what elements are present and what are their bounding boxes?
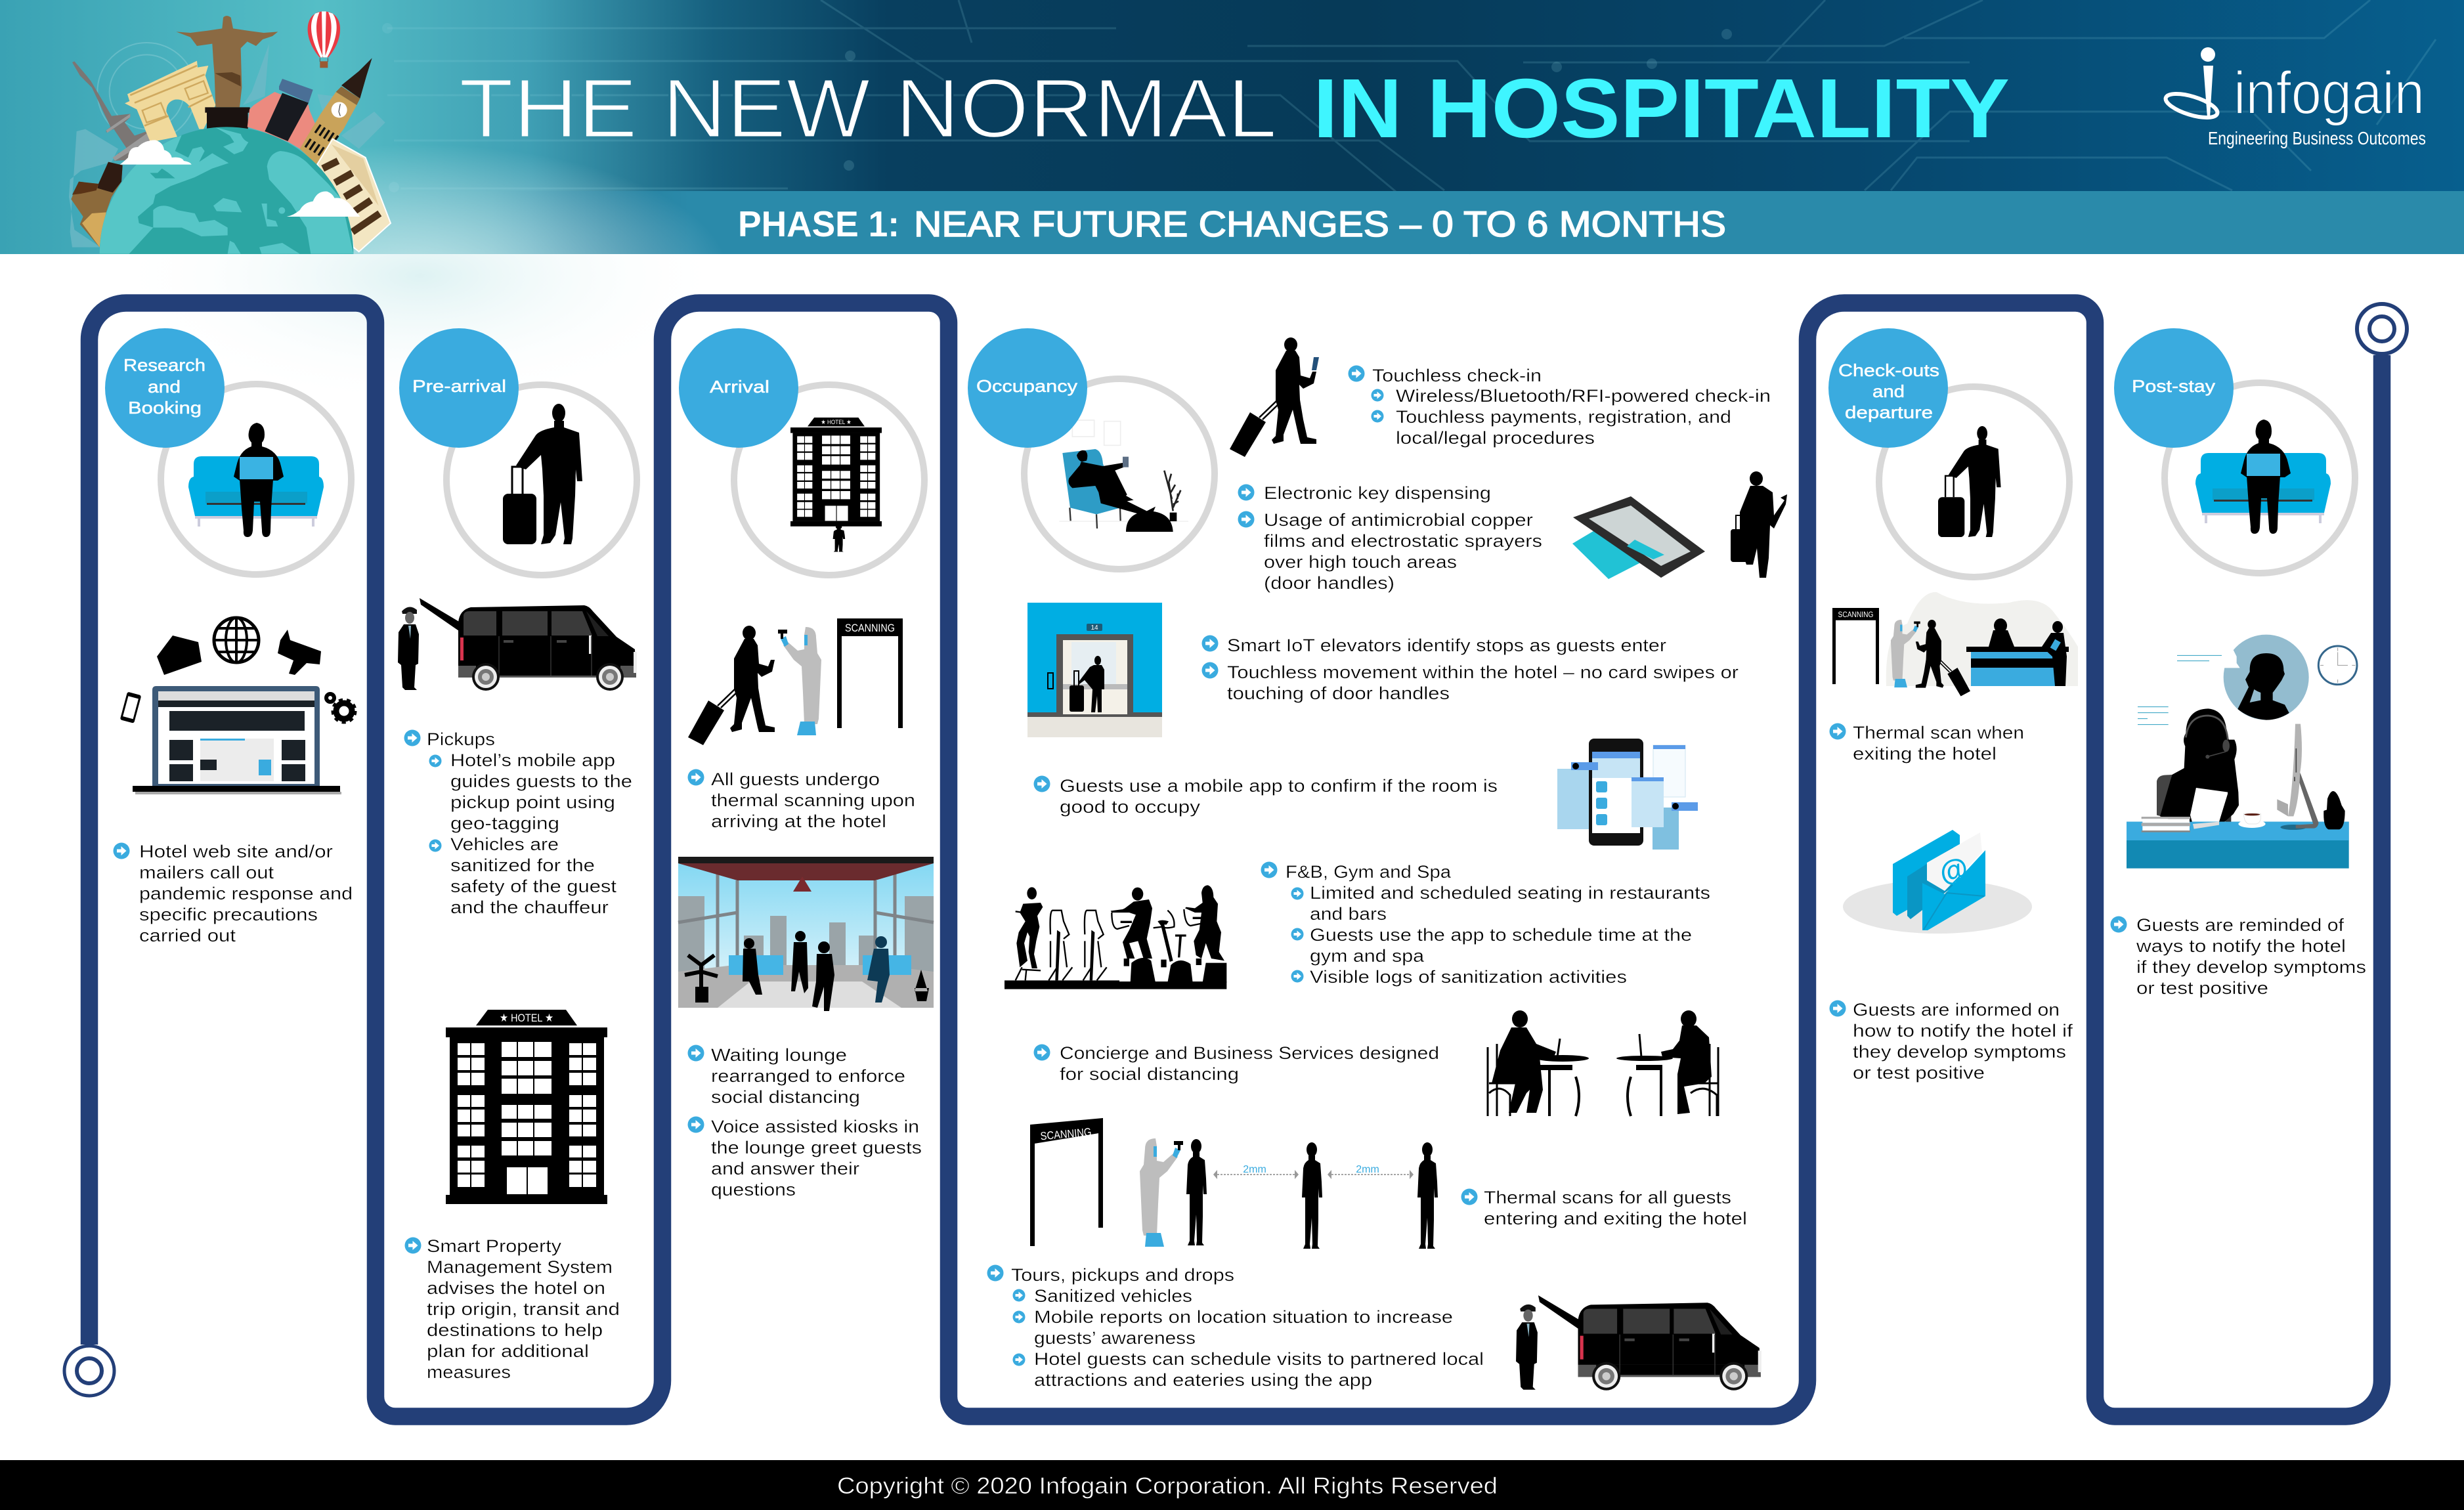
text block: smart property: measures xyxy=(427,1362,511,1382)
icon: megaphone xyxy=(278,630,321,675)
icon: mobile app screens xyxy=(1557,739,1698,850)
stage badge: and xyxy=(1872,381,1905,401)
stage badge: Post-stay xyxy=(2132,376,2215,396)
icon: dark tower xyxy=(265,79,313,141)
text block: thermal scanning xyxy=(688,769,915,831)
stage badge: Check-outs xyxy=(1838,360,1939,380)
icon: pedestal xyxy=(205,107,250,129)
icon: man with suitcase xyxy=(1938,426,2001,537)
text block: smart property: destinations to help xyxy=(427,1320,603,1340)
icon: person on sofa xyxy=(188,423,324,537)
text block: f&b gym spa: and bars xyxy=(1310,904,1387,924)
icon: key card and tablet xyxy=(1572,496,1705,579)
text block: pickups: sanitized for the xyxy=(450,855,595,875)
ring xyxy=(734,385,924,575)
text block: touchless check-in: local/legal procedures xyxy=(1396,428,1595,448)
soft glow under header xyxy=(112,144,729,407)
text block: concierge xyxy=(1033,1043,1439,1084)
title: IN HOSPITALITY xyxy=(1313,62,2010,156)
icon: gears xyxy=(326,694,355,722)
icon: guest with suitcase and hand raised xyxy=(1731,471,1787,578)
icon: small guest xyxy=(833,525,845,551)
text block: touchless check-in: Touchless check-in xyxy=(1372,366,1542,385)
text block: notify hotel: they develop symptoms xyxy=(1853,1042,2066,1062)
icon: laptop with website xyxy=(133,686,341,794)
text block: reminder: Guests are reminded of xyxy=(2136,915,2345,935)
illustration: smart elevator: 14 xyxy=(1091,624,1098,632)
text block: touchless check-in: Wireless/Bluetooth/RFI-powered check-in xyxy=(1396,386,1771,406)
text block: concierge: for social distancing xyxy=(1060,1064,1239,1084)
stage badge xyxy=(968,328,1087,448)
icon: van and chauffeur xyxy=(1516,1295,1762,1391)
illustration: call centre agent xyxy=(2127,635,2357,869)
icon: hazmat scanner xyxy=(778,627,821,735)
text block: iot elevators: Touchless movement within the hotel – no card swipes or xyxy=(1227,662,1739,682)
icon: scanner attendant xyxy=(1140,1138,1183,1247)
ring xyxy=(446,385,637,575)
logo: infogain xyxy=(2163,47,2426,148)
header banner xyxy=(0,0,2464,254)
text block: tours: attractions and eateries using the app xyxy=(1034,1370,1372,1390)
distance marker one: 2mm xyxy=(1243,1164,1266,1175)
text block: tours: guests’ awareness xyxy=(1034,1328,1196,1348)
text block: pickups: pickup point using xyxy=(450,792,615,812)
text block: key and copper films: Usage of antimicrobial copper xyxy=(1264,510,1533,530)
icon: classical building xyxy=(317,139,391,251)
monitor xyxy=(2277,724,2319,830)
books xyxy=(2142,817,2190,832)
text block: notify hotel: or test positive xyxy=(1853,1063,1985,1083)
text block: pickups: Hotel’s mobile app xyxy=(450,750,615,770)
text block: tours: Mobile reports on location situation to increase xyxy=(1034,1307,1453,1327)
icon: van and chauffeur xyxy=(398,598,637,691)
icon: email envelopes xyxy=(1843,830,2032,934)
text block: lounge and kiosks: rearranged to enforce xyxy=(711,1066,905,1086)
icon: globe xyxy=(214,618,259,662)
stage badge xyxy=(399,328,519,448)
text block: tours: Hotel guests can schedule visits to partnered local xyxy=(1034,1349,1484,1369)
title: THE NEW NORMAL xyxy=(459,62,1277,156)
text block: smart property: Management System xyxy=(427,1257,613,1277)
text block: pickups: Vehicles are xyxy=(450,834,559,854)
icon: eiffel tower xyxy=(72,61,151,161)
panel: check-outs and departure xyxy=(1828,328,2078,1083)
icon: two guests at separated tables xyxy=(1488,1010,1718,1116)
text block: f&b gym spa: Guests use the app to schedule time at the xyxy=(1310,925,1692,945)
text block: thermal scanning: All guests undergo xyxy=(711,769,880,789)
icon: angled gate xyxy=(1030,1118,1103,1246)
stage badge xyxy=(2114,328,2234,448)
text block: thermal scan: Thermal scan when xyxy=(1853,723,2024,743)
desk xyxy=(2127,822,2349,869)
text block: touchless check-in: Touchless payments, registration, and xyxy=(1396,407,1731,427)
stage badge xyxy=(679,328,798,448)
panel: pre-arrival xyxy=(398,328,637,1382)
stage badge: Research xyxy=(123,355,205,375)
stage badge xyxy=(1828,328,1948,448)
text block: concierge: Concierge and Business Services designed xyxy=(1060,1043,1439,1063)
icon: angled gate: SCANNING xyxy=(1040,1126,1092,1142)
illustration: gym silhouettes xyxy=(1005,885,1226,989)
text block: smart property: Smart Property xyxy=(427,1236,562,1256)
distance marker two xyxy=(1328,1164,1414,1179)
icon: end target xyxy=(2357,304,2407,354)
text block: room app: Guests use a mobile app to confirm if the room is xyxy=(1060,776,1498,796)
stage badge: Occupancy xyxy=(976,376,1077,396)
title xyxy=(459,62,2010,156)
illustration: smart elevator xyxy=(1027,603,1162,737)
subtitle: PHASE 1: xyxy=(738,204,899,244)
text block: notify hotel xyxy=(1829,1000,2073,1083)
text block: pickups: and the chauffeur xyxy=(450,897,609,917)
illustration: exit scan at reception xyxy=(1832,592,2078,696)
text block: lounge and kiosks: Waiting lounge xyxy=(711,1045,847,1065)
ring xyxy=(1024,379,1215,569)
text block: lounge and kiosks: the lounge greet guests xyxy=(711,1138,922,1157)
icon: phone xyxy=(120,692,141,723)
text block: pickups: safety of the guest xyxy=(450,876,617,896)
icon: walking guest xyxy=(688,626,775,745)
stage badge: Pre-arrival xyxy=(412,376,506,396)
paper xyxy=(2193,822,2219,829)
footer xyxy=(0,1460,2464,1510)
icon: person on sofa xyxy=(2195,420,2331,534)
text block: touchless check-in xyxy=(1349,365,1771,448)
panel: post-stay xyxy=(2110,328,2366,998)
text block: smart property: advises the hotel on xyxy=(427,1278,605,1298)
ring xyxy=(161,384,351,574)
panel: occupancy xyxy=(968,328,1787,1391)
stage badge xyxy=(105,328,225,448)
ring xyxy=(1879,387,2069,577)
icon: brochure xyxy=(157,636,202,675)
icon: hotel building xyxy=(446,1010,607,1204)
text block: room app xyxy=(1033,776,1498,817)
landmarks and globe illustration xyxy=(69,11,391,254)
text block: pickups: guides guests to the xyxy=(450,771,632,791)
text block: reminder: if they develop symptoms xyxy=(2136,957,2366,977)
stage badge: Arrival xyxy=(710,377,769,397)
text block: lounge and kiosks: Voice assisted kiosks in xyxy=(711,1117,919,1136)
text block: thermal scans: Thermal scans for all guests xyxy=(1484,1188,1731,1207)
icon: cactus xyxy=(2324,791,2345,829)
text block: f&b gym spa: Limited and scheduled seating in restaurants xyxy=(1310,883,1710,903)
text block: lounge and kiosks: questions xyxy=(711,1180,796,1199)
icon: start target xyxy=(64,1346,114,1396)
stage badge: and xyxy=(148,377,181,397)
icon: guest walking with phone xyxy=(1230,337,1319,457)
stage badge: departure xyxy=(1845,402,1933,422)
text block: lounge and kiosks xyxy=(688,1045,922,1199)
text block: thermal scan: exiting the hotel xyxy=(1853,744,1997,764)
text block: pickups: Pickups xyxy=(427,729,495,749)
text block: smart property: trip origin, transit and xyxy=(427,1299,620,1319)
globe land masses xyxy=(100,127,353,254)
text block: tours: Tours, pickups and drops xyxy=(1011,1265,1234,1285)
illustration: waiting lounge xyxy=(678,857,934,1011)
text block: pickups: geo-tagging xyxy=(450,813,559,833)
icon: hot air balloon xyxy=(308,11,340,68)
text block: smart property xyxy=(404,1236,620,1382)
cup xyxy=(2238,813,2266,828)
icon: scanning gate xyxy=(837,618,903,728)
text block: f&b gym spa xyxy=(1261,861,1710,987)
journey path xyxy=(64,303,2407,1416)
icon: arc de triomphe xyxy=(125,61,215,141)
text block: key and copper films: (door handles) xyxy=(1264,573,1394,593)
icon: guest two xyxy=(1302,1142,1322,1249)
text block: f&b gym spa: gym and spa xyxy=(1310,946,1424,966)
footer: Copyright © 2020 Infogain Corporation. All Rights Reserved xyxy=(837,1473,1498,1499)
text block: notify hotel: how to notify the hotel if xyxy=(1853,1021,2073,1041)
illustration: distanced queue at scanner xyxy=(1030,1118,1438,1249)
text block: carried out xyxy=(139,926,236,945)
icon: clock xyxy=(2318,646,2357,685)
text block: reminder xyxy=(2110,915,2366,998)
text block: f&b gym spa: F&B, Gym and Spa xyxy=(1286,862,1451,882)
text block: specific precautions xyxy=(139,905,318,924)
text block: thermal scans xyxy=(1461,1188,1747,1228)
text block: notify hotel: Guests are informed on xyxy=(1853,1000,2060,1020)
icon: guest three xyxy=(1417,1142,1438,1249)
text block: thermal scanning: arriving at the hotel xyxy=(711,811,886,831)
icon: brown building xyxy=(71,162,123,248)
text block: key and copper films: Electronic key dispensing xyxy=(1264,483,1491,503)
text block: room app: good to occupy xyxy=(1060,797,1201,817)
text block: mailers call out xyxy=(139,863,274,882)
icon: clouds xyxy=(120,140,360,217)
text block: lounge and kiosks: and answer their xyxy=(711,1159,859,1178)
text block: iot elevators: Smart IoT elevators identify stops as guests enter xyxy=(1227,636,1666,655)
text block: pandemic response and xyxy=(139,884,353,903)
text block: key and copper films xyxy=(1238,483,1542,593)
text block: tours: Sanitized vehicles xyxy=(1034,1286,1192,1306)
text block: thermal scanning: thermal scanning upon xyxy=(711,790,915,810)
call bubble with guest xyxy=(2177,635,2309,720)
icon: email envelopes: @ xyxy=(1936,851,1972,890)
stage badge: Booking xyxy=(128,398,202,418)
distance marker one xyxy=(1213,1164,1299,1179)
text block: smart property: plan for additional xyxy=(427,1341,589,1361)
icon: small hotel xyxy=(790,418,882,527)
text block: iot elevators xyxy=(1201,636,1739,703)
icon: big ben xyxy=(300,58,372,164)
icon: christ statue xyxy=(176,16,278,107)
text block: reminder: or test positive xyxy=(2136,978,2268,998)
text block: f&b gym spa: Visible logs of sanitization activities xyxy=(1310,967,1627,987)
text block: key and copper films: films and electrostatic sprayers xyxy=(1264,531,1542,551)
ring xyxy=(2165,383,2355,573)
text block: thermal scan xyxy=(1829,723,2024,764)
text block: tours xyxy=(987,1264,1484,1390)
distance marker two: 2mm xyxy=(1356,1164,1379,1175)
panel: research and booking xyxy=(105,328,355,945)
text block xyxy=(113,842,353,945)
text block: lounge and kiosks: social distancing xyxy=(711,1087,860,1107)
text block: pickups xyxy=(404,729,632,917)
icon: guest one xyxy=(1186,1139,1207,1245)
icon: pyramid xyxy=(248,92,315,149)
icon: man with suitcase xyxy=(503,404,582,544)
text block: Hotel web site and/or xyxy=(139,842,333,861)
panel: arrival xyxy=(678,328,934,1199)
subtitle: NEAR FUTURE CHANGES – 0 TO 6 MONTHS xyxy=(914,204,1726,244)
text block: key and copper films: over high touch areas xyxy=(1264,552,1457,572)
icon: guest relaxing in chair xyxy=(1059,420,1188,532)
text block: reminder: ways to notify the hotel xyxy=(2136,936,2346,956)
globe xyxy=(100,127,353,254)
text block: iot elevators: touching of door handles xyxy=(1227,683,1450,703)
text block: thermal scans: entering and exiting the hotel xyxy=(1484,1209,1747,1228)
logo: infogain: infogain xyxy=(2234,60,2425,127)
